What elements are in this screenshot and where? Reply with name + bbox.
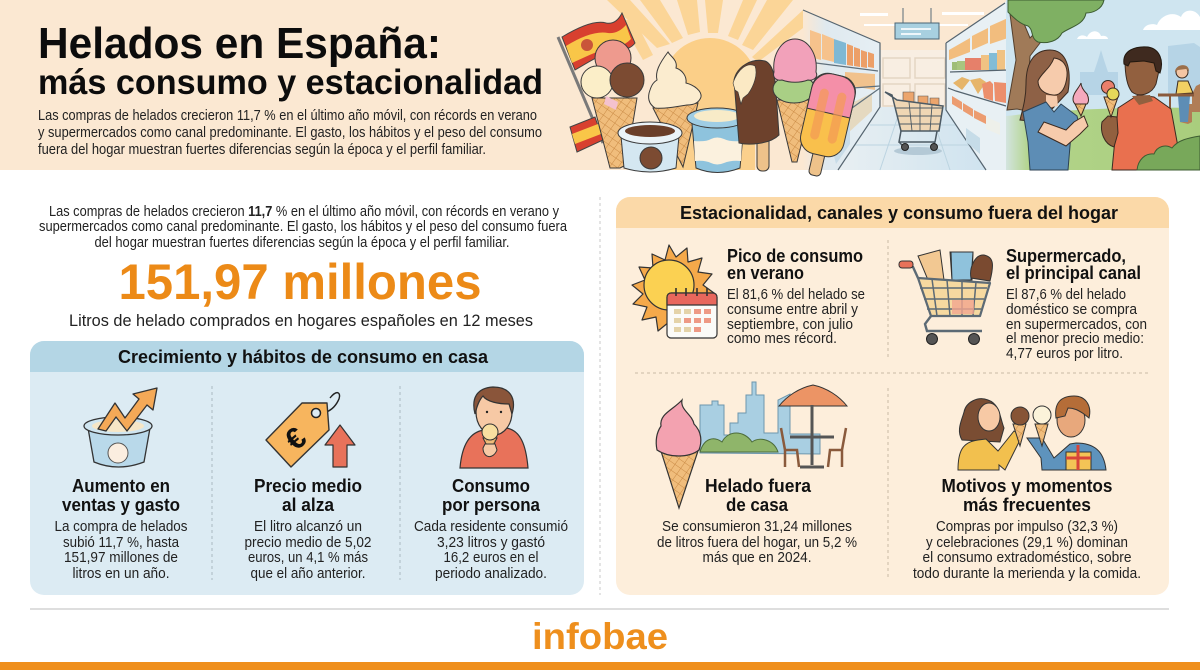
column: precio: euros, un 4,1 % más: [248, 550, 368, 566]
text: supermercado: el principal canal: [1006, 262, 1141, 283]
column: precio: precio medio de 5,02: [244, 535, 372, 551]
text: helado fuera: de litros fuera del hogar, un 5,2 %: [657, 535, 857, 551]
panel: estacionalidad: [616, 197, 1169, 595]
column: precio: que el año anterior.: [250, 566, 366, 582]
logo: infobae: infobae: [532, 616, 668, 657]
column: aumento: [54, 475, 188, 582]
text: supermercado: el menor precio medio:: [1006, 331, 1144, 347]
hero illustration: triple scoop cone: [581, 40, 644, 168]
title: más consumo y estacionalidad: [38, 63, 543, 102]
text: pico: [727, 245, 865, 347]
panel heading: [30, 341, 584, 372]
vertical divider: [599, 197, 601, 595]
hero illustration: vanilla tub: [687, 108, 747, 172]
woman: [1020, 50, 1088, 170]
column: aumento: ventas y gasto: [62, 494, 180, 515]
hero illustration: sunburst: [607, 0, 807, 170]
pink ice cream: [1073, 83, 1088, 116]
header intro text: y supermercados como canal predominante. El gasto, los hábitos y el peso del consumo: [38, 125, 542, 141]
column: precio: al alza: [282, 494, 335, 515]
vanilla ice cream: [1033, 406, 1051, 446]
title: Helados en España:: [38, 19, 441, 68]
column: aumento: subió 11,7 %, hasta: [63, 535, 179, 551]
text: supermercado: 4,77 euros por litro.: [1006, 346, 1123, 362]
text: supermercado: en supermercados, con: [1006, 317, 1147, 333]
man: [1027, 396, 1106, 470]
terrace table: [779, 385, 847, 467]
hero illustration: chocolate tub: [618, 122, 682, 172]
right shelves: [946, 0, 1008, 170]
column: consumo: Consumo: [452, 475, 530, 496]
left shelves: [803, 10, 880, 170]
text: motivos: Motivos y momentos: [942, 475, 1112, 496]
pink soft serve: [656, 400, 701, 508]
arrow up: [325, 425, 355, 467]
text: supermercado: Supermercado,: [1006, 245, 1126, 266]
panel: crecimiento: [30, 341, 584, 595]
icon: price tag: €: [279, 421, 313, 457]
column: consumo: Cada residente consumió: [414, 519, 568, 535]
text: motivos: y celebraciones (29,1 %) dominan: [926, 535, 1128, 551]
tree: [1007, 0, 1104, 111]
text: pico: como mes récord.: [727, 331, 837, 347]
column: consumo: 3,23 litros y gastó: [437, 535, 545, 551]
panel heading: [616, 197, 1169, 228]
icon: sun with calendar: [632, 245, 717, 338]
icon: tub with rising arrow: [84, 388, 157, 467]
bush: [1137, 136, 1200, 170]
big number: 151,97 millones: [118, 254, 482, 310]
panel heading: Estacionalidad, canales y consumo fuera del hogar: [680, 202, 1118, 223]
text: helado fuera: de casa: [726, 494, 789, 515]
column: consumo: [414, 475, 568, 582]
text: motivos: [913, 475, 1141, 582]
text: pico: El 81,6 % del helado se: [727, 287, 865, 303]
intro paragraph: supermercados como canal predominante. El gasto, los hábitos y el peso del consumo fuera: [39, 219, 567, 235]
column: precio: Precio medio: [254, 475, 362, 496]
text: motivos: todo durante la merienda y la comida.: [913, 566, 1141, 582]
hero illustration: chocolate bar: [733, 60, 779, 171]
icon: person eating ice cream: [460, 387, 528, 468]
hero illustration: soft serve cone: [649, 52, 701, 167]
column: consumo: por persona: [442, 494, 541, 515]
woman: [958, 399, 1022, 470]
text: helado fuera: Se consumieron 31,24 millones: [662, 519, 852, 535]
icon: price tag: [266, 393, 355, 467]
column: precio: El litro alcanzó un: [254, 519, 362, 535]
background person at cafe table: [1158, 65, 1200, 124]
text: motivos: más frecuentes: [963, 494, 1091, 515]
text: supermercado: doméstico se compra: [1006, 302, 1137, 318]
text: supermercado: [1006, 245, 1147, 362]
column: aumento: litros en un año.: [72, 566, 170, 582]
column: precio: [244, 475, 372, 582]
text: helado fuera: más que en 2024.: [702, 550, 812, 566]
shopping cart: [885, 92, 943, 155]
intro paragraph: del hogar muestran fuertes diferencias según la época y el perfil familiar.: [94, 235, 510, 251]
hero illustration: Spanish flags: [558, 13, 635, 152]
header intro text: fuera del hogar muestran fuertes diferencias según la época y el perfil familiar.: [38, 142, 486, 158]
intro paragraph: Las compras de helados crecieron 11,7 % en el último año móvil, con récords en verano y: [49, 204, 560, 220]
bottom bar: [0, 662, 1200, 670]
footer rule: [30, 608, 1169, 610]
text: pico: septiembre, con julio: [727, 317, 853, 333]
icon: couple with ice creams and gift: [958, 396, 1106, 470]
header intro text: [38, 108, 542, 158]
text: supermercado: El 87,6 % del helado: [1006, 287, 1126, 303]
icon: ice cream and city terrace: [656, 382, 847, 508]
hero illustration: popsicle: [793, 70, 859, 180]
column: consumo: 16,2 euros en el: [444, 550, 538, 566]
column: consumo: periodo analizado.: [435, 566, 547, 582]
hero illustration: pink and green cone: [773, 39, 817, 162]
header intro text: Las compras de helados crecieron 11,7 % en el último año móvil, con récords en verano: [38, 108, 537, 124]
text: motivos: Compras por impulso (32,3 %): [936, 519, 1118, 535]
intro paragraph: [39, 204, 567, 251]
icon: shopping cart: [899, 250, 992, 344]
column: aumento: 151,97 millones de: [64, 550, 178, 566]
big number caption: Litros de helado comprados en hogares españoles en 12 meses: [69, 312, 533, 330]
column: aumento: La compra de helados: [54, 519, 188, 535]
text: pico: consume entre abril y: [727, 302, 859, 318]
chocolate ice cream: [1011, 407, 1029, 446]
panel heading: Crecimiento y hábitos de consumo en casa: [118, 346, 489, 367]
hero illustration: supermarket aisle: [803, 0, 1012, 170]
text: helado fuera: [657, 475, 857, 566]
man: [1102, 47, 1178, 170]
text: motivos: el consumo extradoméstico, sobre: [922, 550, 1132, 566]
city skyline: [700, 382, 820, 454]
text: pico: Pico de consumo: [727, 245, 863, 266]
header band: [0, 0, 1200, 180]
ice cream held by man: [1102, 80, 1119, 117]
title: [38, 19, 543, 102]
text: helado fuera: Helado fuera: [705, 475, 812, 496]
column: aumento: Aumento en: [72, 475, 170, 496]
hero illustration: park couple: [1006, 0, 1200, 170]
aisle sign: [895, 8, 939, 39]
text: pico: en verano: [727, 262, 804, 283]
